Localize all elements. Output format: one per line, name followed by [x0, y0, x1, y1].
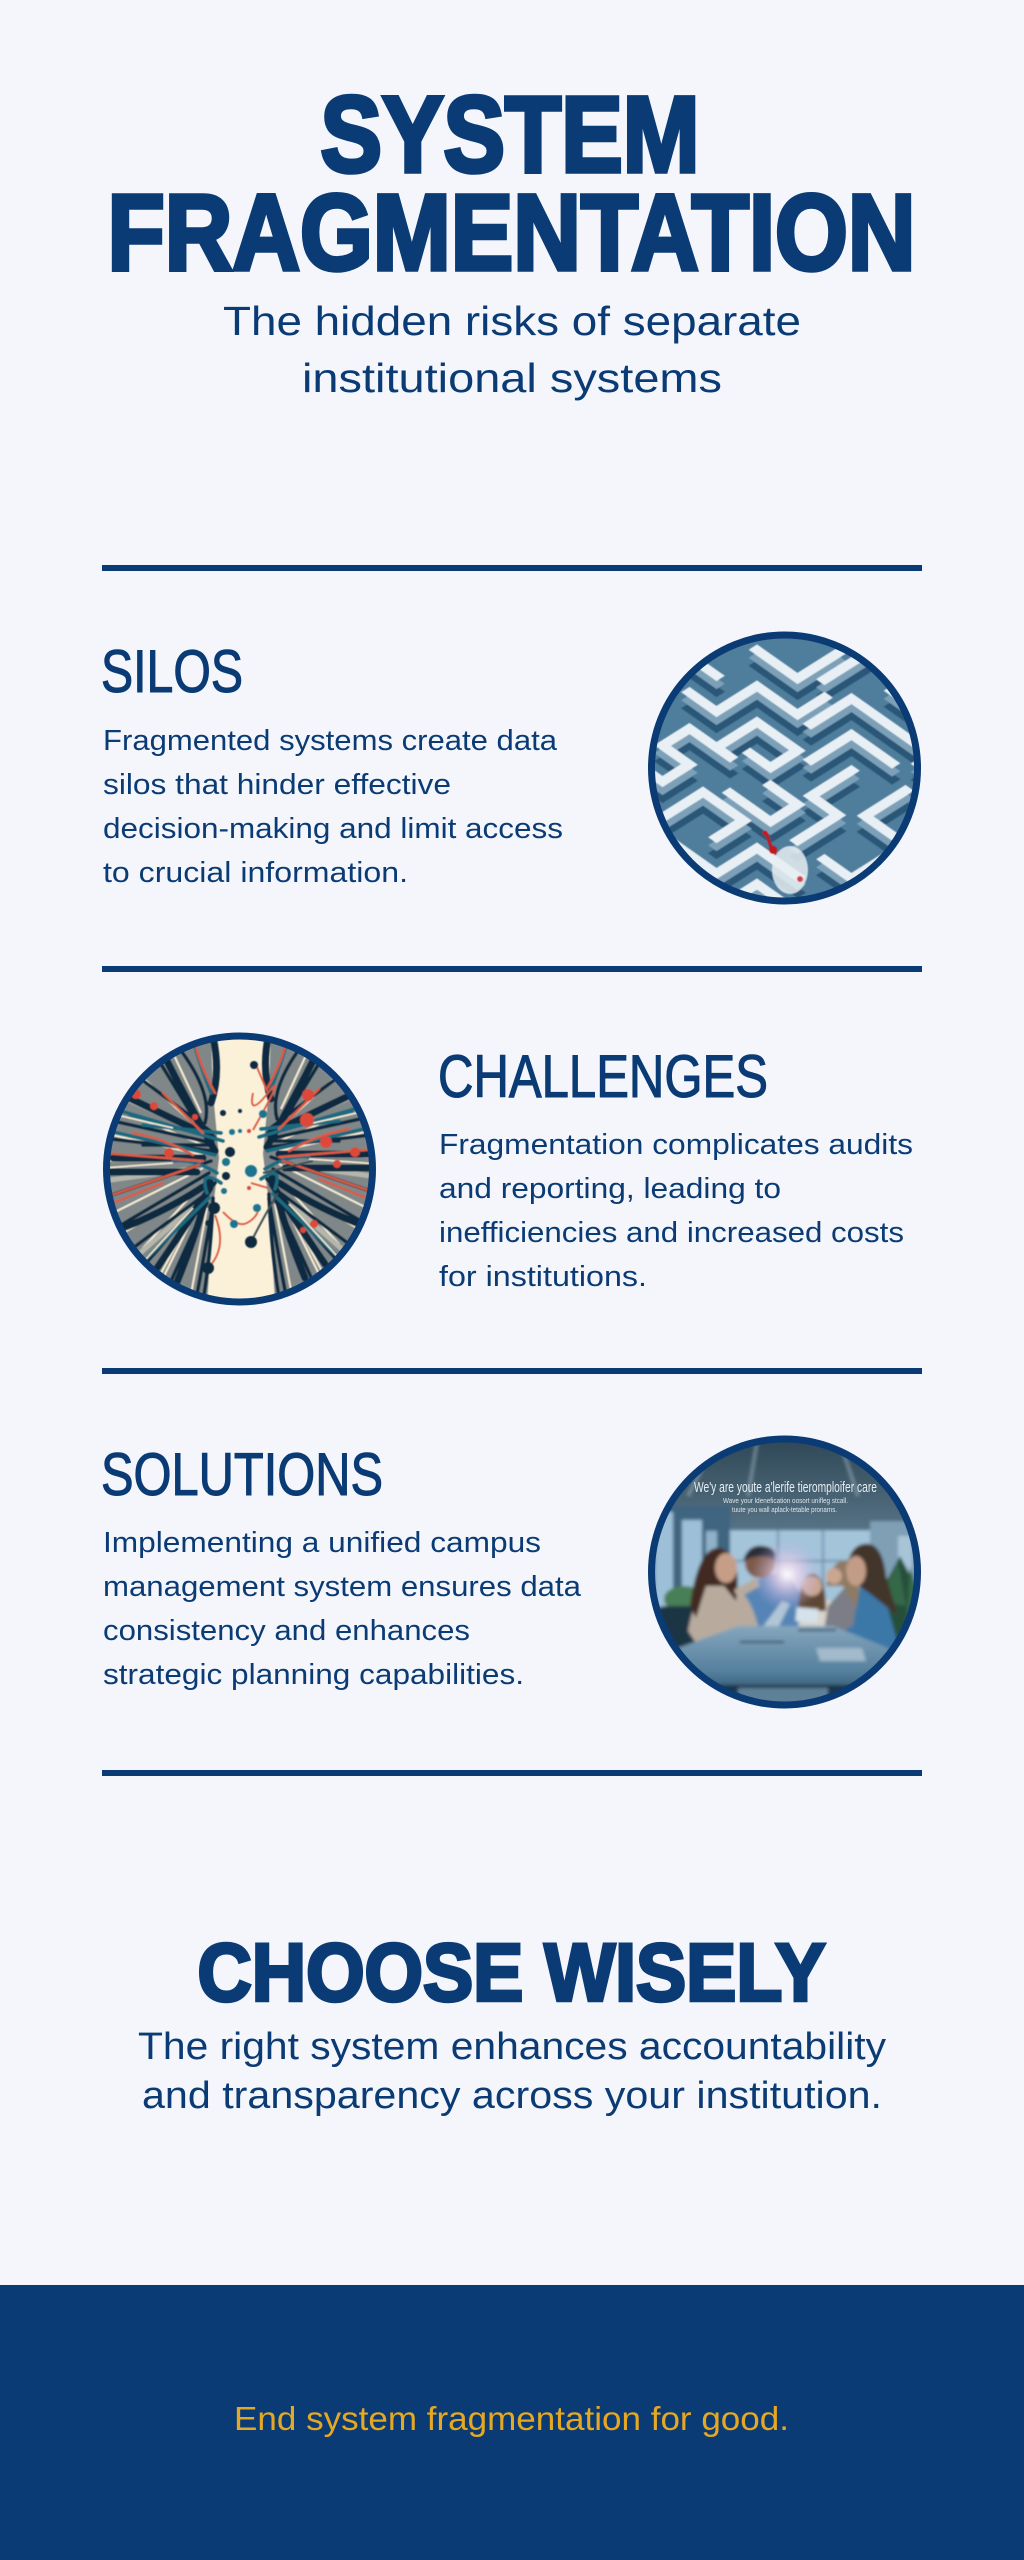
- icon: team meeting photo circle: [648, 1436, 921, 1709]
- image caption text: tuute you wall aplack-tetable pronarns.: [732, 1507, 837, 1514]
- table: [678, 1624, 890, 1687]
- icon: tangled network circle: [103, 1029, 379, 1305]
- title: FRAGMENTATION: [108, 172, 916, 292]
- text block: silos: decision-making and limit access: [103, 813, 563, 845]
- icon: maze photo circle: [648, 632, 921, 904]
- panel: silos: [102, 632, 921, 904]
- text block: challenges: [439, 1129, 913, 1293]
- footer band: [0, 2285, 1024, 2560]
- closing text: The right system enhances accountability: [138, 2026, 886, 2068]
- text block: solutions: strategic planning capabilities.: [103, 1659, 524, 1691]
- text block: challenges: and reporting, leading to: [439, 1173, 781, 1205]
- man: [744, 1573, 802, 1628]
- footer text: End system fragmentation for good.: [234, 2401, 789, 2438]
- image caption text: We'y are youte a'lerife tieromploifer care: [694, 1480, 877, 1496]
- small woman: [796, 1598, 832, 1628]
- subtitle: [223, 298, 801, 401]
- text block: solutions: Implementing a unified campus: [103, 1527, 541, 1559]
- text block: challenges: inefficiencies and increased costs: [439, 1217, 904, 1249]
- panel: challenges: [103, 1029, 913, 1305]
- heading: challenges: CHALLENGES: [438, 1043, 768, 1110]
- right woman in blue: [844, 1585, 898, 1650]
- closing heading: CHOOSE WISELY: [198, 1928, 826, 2018]
- title: [108, 74, 916, 292]
- text block: silos: silos that hinder effective: [103, 769, 451, 801]
- text block: silos: to crucial information.: [103, 857, 408, 889]
- text block: solutions: consistency and enhances: [103, 1615, 470, 1647]
- closing text: [138, 2026, 886, 2117]
- image caption text: [694, 1480, 877, 1514]
- left woman: [688, 1581, 758, 1646]
- text block: silos: Fragmented systems create data: [103, 725, 558, 757]
- text block: challenges: Fragmentation complicates audits: [439, 1129, 913, 1161]
- image caption text: Wave your ldenefication oosort unifleg stcall.: [723, 1498, 848, 1505]
- closing text: and transparency across your institution.: [142, 2075, 882, 2117]
- text block: silos: [103, 725, 563, 889]
- blonde woman: [823, 1587, 858, 1632]
- heading: silos: SILOS: [101, 638, 243, 705]
- panel: solutions: [101, 1436, 921, 1709]
- subtitle: The hidden risks of separate: [223, 298, 801, 344]
- subtitle: institutional systems: [302, 355, 722, 401]
- text block: challenges: for institutions.: [439, 1261, 647, 1293]
- text block: solutions: [103, 1527, 582, 1691]
- heading: solutions: SOLUTIONS: [101, 1441, 383, 1508]
- text block: solutions: management system ensures data: [103, 1571, 582, 1603]
- laptops: [762, 1600, 792, 1628]
- title: SYSTEM: [320, 74, 700, 194]
